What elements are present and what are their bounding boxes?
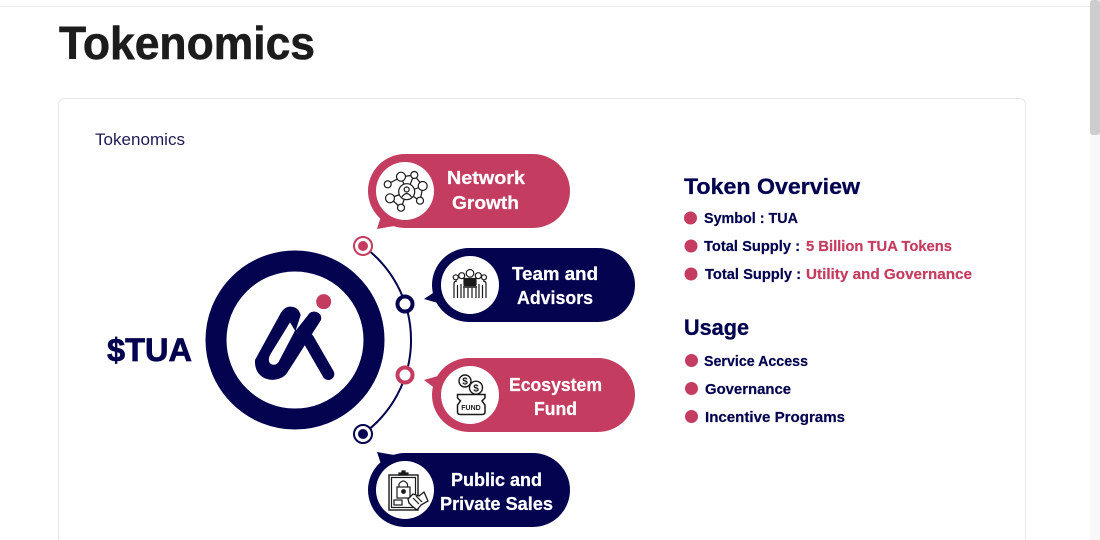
list: token overview items: 5 Billion TUA Tokens	[806, 238, 952, 255]
connector arc with nodes	[354, 237, 412, 443]
icon: clipboard lock and handshake	[389, 471, 428, 510]
label: Team and	[512, 263, 598, 284]
heading: usage: Usage	[684, 315, 749, 340]
label: Private Sales	[440, 493, 553, 514]
logo mark	[255, 294, 331, 380]
label: Growth	[452, 192, 519, 213]
icon: fund jar with coins: FUND	[461, 405, 481, 412]
list: token overview items: Total Supply :	[705, 266, 801, 283]
list: usage items: Incentive Programs	[705, 409, 845, 426]
heading: token overview: Token Overview	[684, 174, 861, 199]
label	[447, 167, 526, 213]
icon: fund jar with coins	[458, 375, 485, 414]
list: token overview items: Symbol : TUA	[704, 210, 798, 227]
label	[512, 263, 598, 308]
panel: tokenomics card	[58, 98, 1026, 540]
label: Advisors	[517, 287, 593, 308]
label: Network	[447, 167, 526, 188]
callout: public and private sales	[368, 452, 570, 527]
label: Fund	[534, 398, 577, 419]
token name label: $TUA	[107, 332, 192, 368]
callout: team and advisors	[424, 248, 635, 322]
list: usage items	[685, 353, 845, 426]
page title: Tokenomics	[59, 17, 315, 69]
callout: ecosystem fund	[424, 358, 635, 432]
icon: team	[453, 270, 486, 298]
card label: Tokenomics	[95, 130, 185, 149]
icon: fund jar with coins: $	[462, 376, 468, 388]
icon: network of people	[384, 172, 427, 211]
list: usage items: Governance	[705, 381, 791, 398]
callout: network growth	[368, 154, 570, 229]
list: token overview items	[684, 210, 972, 283]
label: Ecosystem	[509, 374, 602, 395]
list: token overview items: Utility and Governance	[806, 266, 972, 283]
scrollbar	[1090, 0, 1100, 540]
icon: fund jar with coins: $	[473, 384, 479, 394]
central logo ring	[216, 261, 374, 419]
list: token overview items: Total Supply :	[704, 238, 800, 255]
label	[509, 374, 602, 419]
label: Public and	[451, 469, 542, 490]
list: usage items: Service Access	[704, 353, 808, 370]
label	[440, 469, 553, 514]
